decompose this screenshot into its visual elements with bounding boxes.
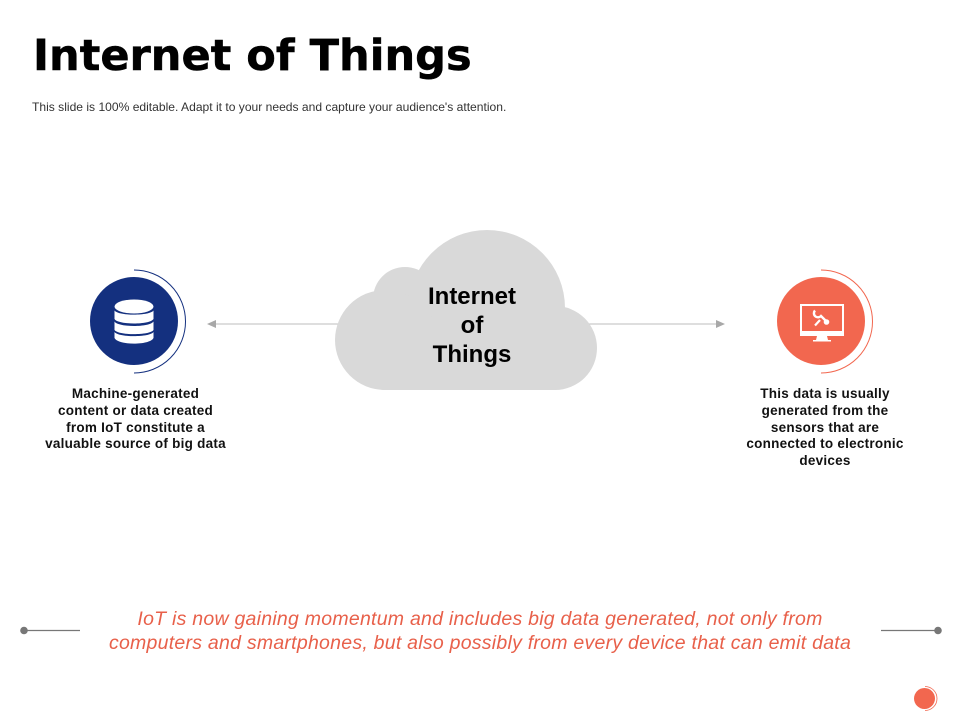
cloud label: Things — [433, 341, 511, 368]
cloud label: of — [461, 312, 483, 339]
right caption: sensors that are — [771, 420, 879, 435]
left caption — [45, 386, 226, 451]
right caption: generated from the — [762, 403, 888, 418]
right decorative connector — [881, 627, 942, 634]
right caption — [746, 386, 904, 468]
left caption: Machine-generated — [72, 386, 199, 401]
cloud label: Internet — [428, 282, 516, 310]
right caption: This data is usually — [760, 386, 890, 401]
left caption: valuable source of big data — [45, 436, 226, 451]
page marker — [914, 686, 937, 710]
subtitle: This slide is 100% editable. Adapt it to your needs and capture your audience's attention. — [32, 100, 506, 114]
left arrow — [207, 320, 345, 328]
left decorative connector — [20, 627, 80, 634]
left caption: content or data created — [58, 403, 213, 418]
icon: database in navy circle — [90, 270, 186, 373]
left caption: from IoT constitute a — [66, 420, 205, 435]
cloud label — [428, 282, 516, 368]
icon: monitor with tools in coral circle — [777, 270, 872, 373]
title: Internet of Things — [33, 31, 472, 81]
bottom statement: IoT is now gaining momentum and includes big data generated, not only from — [137, 608, 823, 630]
right caption: devices — [799, 453, 851, 468]
bottom statement: computers and smartphones, but also possibly from every device that can emit data — [109, 632, 851, 654]
right caption: connected to electronic — [746, 436, 904, 451]
cloud — [335, 230, 597, 390]
right arrow — [585, 320, 725, 328]
bottom statement — [109, 608, 851, 654]
